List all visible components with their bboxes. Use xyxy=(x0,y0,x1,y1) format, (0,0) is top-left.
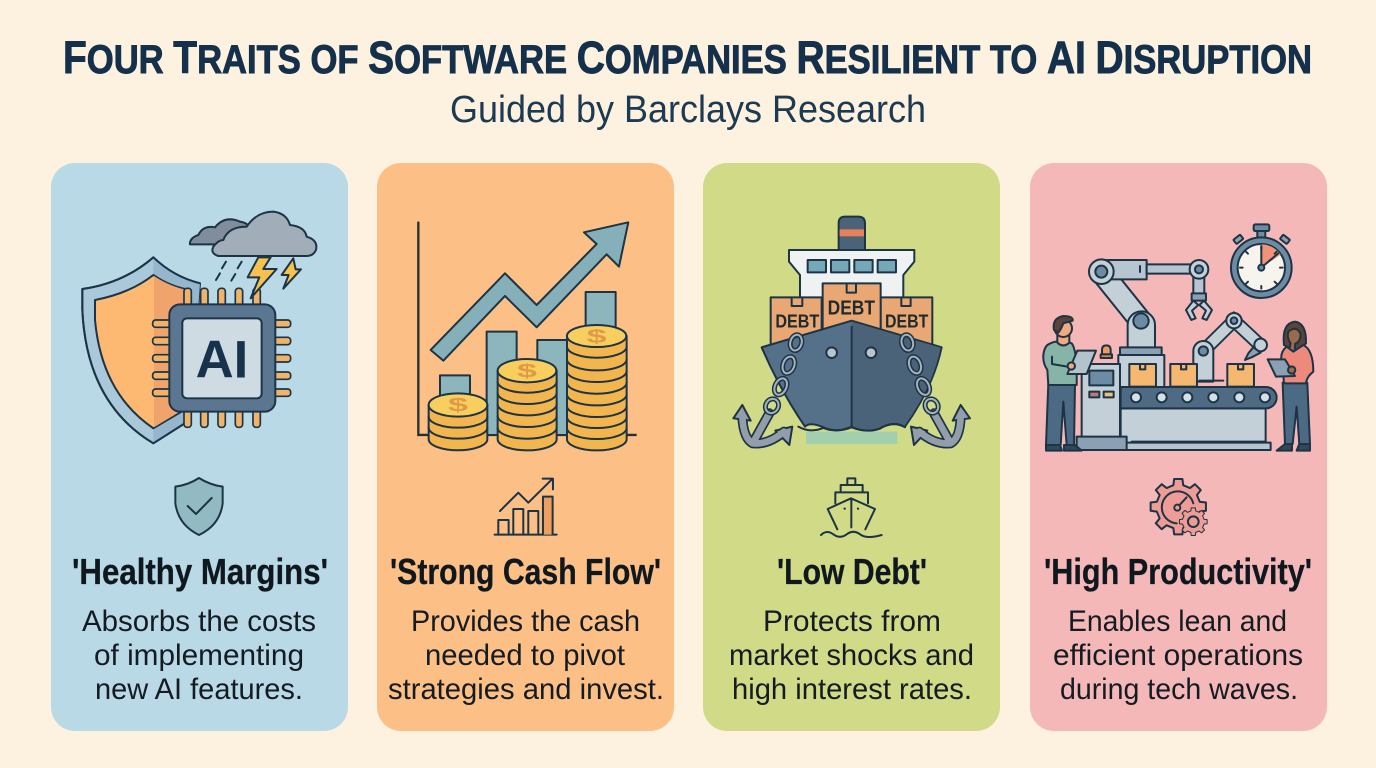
title: FOUR TRAITS OF SOFTWARE COMPANIES RESILIENT TO AI DISRUPTION xyxy=(63,32,1312,83)
axes xyxy=(418,222,637,435)
icon: small gears with gauge xyxy=(1151,479,1207,535)
shield xyxy=(82,257,200,443)
growth arrow xyxy=(431,222,628,361)
chain right highlight xyxy=(900,333,941,415)
chip pins xyxy=(153,288,291,427)
debt crates: DEBT xyxy=(885,310,929,331)
conveyor table xyxy=(1121,408,1271,450)
description xyxy=(82,605,316,706)
chip body xyxy=(169,304,275,412)
description: Enables lean and xyxy=(1068,605,1287,638)
panel: high productivity xyxy=(1030,163,1327,731)
description: market shocks and xyxy=(729,639,974,672)
icon: shield, AI chip and storm clouds xyxy=(82,212,316,443)
description xyxy=(388,605,664,706)
heading: 'Healthy Margins' xyxy=(72,551,328,592)
panel: strong cash flow xyxy=(377,163,674,731)
heading: 'High Productivity' xyxy=(1044,551,1312,592)
icon: rising chart with coin stacks xyxy=(418,222,637,450)
heading: 'Low Debt' xyxy=(777,551,927,592)
description: Provides the cash xyxy=(411,605,640,638)
coin stack large xyxy=(567,325,627,450)
box tabs xyxy=(1140,364,1243,369)
hull xyxy=(762,321,942,431)
description: Absorbs the costs xyxy=(82,605,316,638)
coin stack small: $ xyxy=(448,394,469,415)
storm clouds xyxy=(190,212,316,298)
chip body: AI xyxy=(196,330,248,389)
panel: low debt xyxy=(703,163,1000,731)
panel: healthy margins xyxy=(51,163,348,731)
debt crates: DEBT xyxy=(775,310,820,331)
description: Protects from xyxy=(763,605,941,638)
description xyxy=(729,605,974,706)
chain left xyxy=(763,333,804,415)
description: new AI features. xyxy=(95,673,303,706)
control machine xyxy=(1077,345,1127,450)
description: strategies and invest. xyxy=(388,673,664,706)
large robot arm xyxy=(1089,259,1212,388)
coin stack medium: $ xyxy=(517,360,538,381)
anchor left xyxy=(733,405,792,445)
description: efficient operations xyxy=(1053,639,1303,672)
coin stack medium xyxy=(498,359,557,450)
icon: small ship xyxy=(821,478,882,537)
small robot arm xyxy=(1193,313,1267,382)
coin stack large: $ xyxy=(587,325,608,346)
subtitle: Guided by Barclays Research xyxy=(450,89,926,131)
anchor right xyxy=(911,405,970,445)
worker right xyxy=(1268,322,1313,451)
description: high interest rates. xyxy=(732,673,972,706)
conveyor belt xyxy=(1121,387,1277,408)
chain right xyxy=(900,333,941,415)
heading: 'Strong Cash Flow' xyxy=(390,551,661,592)
description xyxy=(1053,605,1303,706)
stopwatch xyxy=(1231,224,1292,298)
icon: factory robots, workers and stopwatch xyxy=(1043,224,1313,451)
debt crates xyxy=(771,283,932,347)
cargo boxes xyxy=(1129,364,1254,387)
worker left xyxy=(1043,316,1096,451)
coin stack small xyxy=(429,393,487,450)
bridge xyxy=(789,250,914,303)
funnel xyxy=(839,217,865,250)
water xyxy=(806,432,897,444)
description: needed to pivot xyxy=(425,639,626,672)
description: of implementing xyxy=(94,639,304,672)
icon: small shield check xyxy=(175,478,223,535)
chain left highlight xyxy=(763,333,804,415)
bars xyxy=(440,292,616,435)
icon: small bar chart with arrow xyxy=(495,479,557,535)
description: during tech waves. xyxy=(1060,673,1298,706)
icon: ship with debt cargo and anchors xyxy=(733,217,970,445)
debt crates: DEBT xyxy=(828,297,875,320)
